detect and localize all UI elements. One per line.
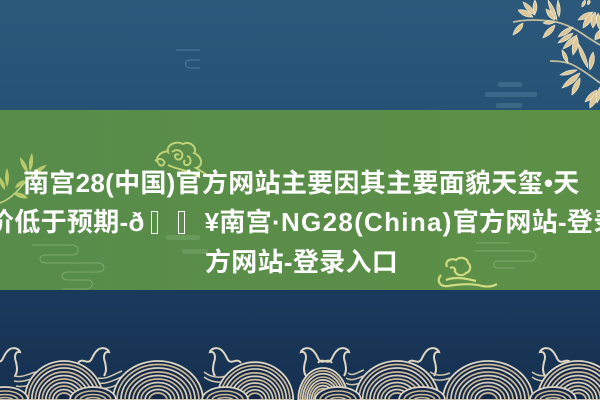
icon: pale cloud blocks top right	[485, 82, 537, 108]
title line 3: 方网站-登录入口	[205, 247, 398, 277]
icon: pale cloud outline top left	[176, 50, 200, 68]
icon: pale bars banner centre	[166, 235, 208, 254]
icon: auspicious cloud lower	[439, 258, 497, 287]
icon: pale line cloud banner right	[474, 243, 536, 268]
icon: bamboo top right	[513, 0, 600, 108]
waves front row	[0, 387, 576, 400]
green banner	[0, 110, 600, 290]
bottom navy background	[0, 290, 600, 400]
title line 1: 南宫28(中国)官方网站主要因其主要面貌天玺•天	[23, 168, 580, 198]
top blue background	[0, 0, 600, 110]
icon: pale line cloud banner left	[32, 245, 104, 289]
icon: auspicious cloud upper	[155, 143, 213, 178]
wave crests and connecting stripes	[0, 348, 571, 388]
icon: bamboo on banner left	[0, 153, 47, 203]
wave row	[25, 361, 600, 400]
